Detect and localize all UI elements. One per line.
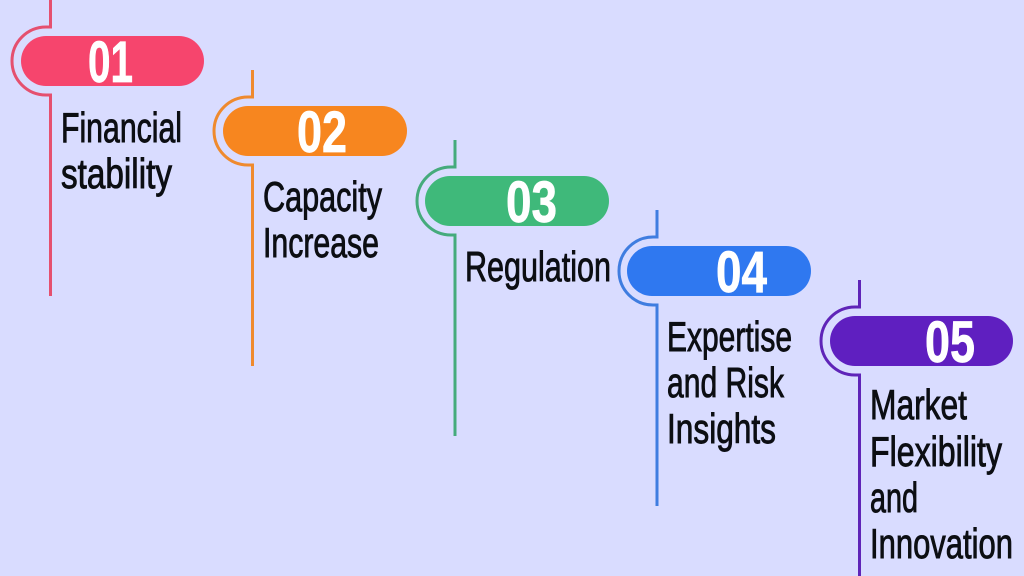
label: Capacity Increase: Capacity [263, 173, 382, 220]
label: Financial stability: Financial [61, 104, 182, 151]
label: Capacity Increase: Increase [263, 219, 379, 266]
connector line 04 [619, 210, 657, 506]
panel: step 01 financial stability [12, 0, 204, 296]
number 03: 03 [506, 170, 557, 235]
panel: step 03 regulation [417, 140, 611, 436]
connector line 03 [417, 140, 455, 436]
panel: step 02 capacity increase [214, 70, 407, 366]
number pill 01 [21, 36, 204, 86]
label: Market Flexibility and Innovation [870, 381, 1013, 567]
label: Regulation: Regulation [465, 243, 611, 290]
panel: step 04 expertise and risk insights [619, 210, 811, 506]
label: Expertise and Risk Insights: Expertise [667, 313, 792, 360]
number pill 05 [830, 316, 1013, 366]
label: Capacity Increase [263, 173, 382, 266]
label: Financial stability: stability [61, 150, 172, 197]
connector line 02 [214, 70, 252, 366]
number pill 04 [627, 246, 811, 296]
number 04: 04 [716, 240, 767, 305]
number 02: 02 [297, 100, 347, 165]
label: Financial stability [61, 104, 182, 197]
number pill 03 [425, 176, 609, 226]
number 05: 05 [925, 310, 975, 375]
panel: step 05 market flexibility and innovation [821, 280, 1013, 576]
label: Expertise and Risk Insights: and Risk [667, 359, 785, 406]
number pill 02 [223, 106, 407, 156]
label: Expertise and Risk Insights: Insights [667, 405, 776, 452]
label: Market Flexibility and Innovation: and [870, 474, 918, 521]
number 01: 01 [88, 30, 133, 95]
connector line 05 [821, 280, 860, 576]
label: Market Flexibility and Innovation: Market [870, 381, 967, 428]
label: Expertise and Risk Insights [667, 313, 792, 452]
connector line 01 [12, 0, 50, 296]
